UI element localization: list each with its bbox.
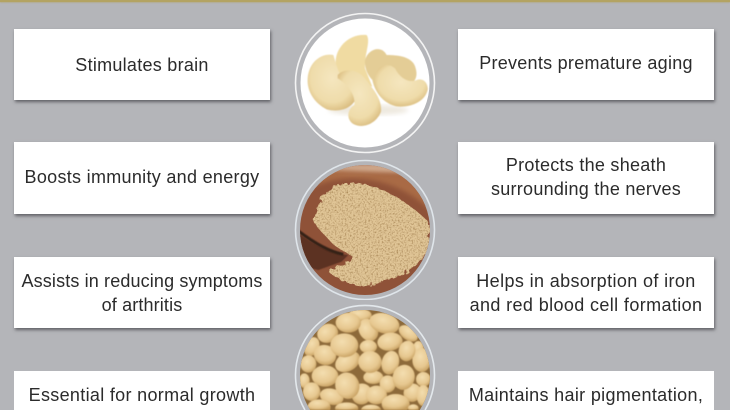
benefit: normal growth: Essential for normal growth bbox=[29, 385, 255, 405]
benefit: arthritis: Assists in reducing symptoms bbox=[22, 270, 262, 290]
image: cashews bbox=[296, 14, 434, 152]
benefit: premature aging: Prevents premature aging bbox=[479, 52, 693, 72]
benefit: iron absorption: and red blood cell formation bbox=[470, 294, 702, 314]
benefit: normal growth bbox=[14, 371, 270, 410]
image: soybeans bbox=[294, 304, 436, 410]
benefit: arthritis: of arthritis bbox=[102, 294, 182, 314]
benefit: stimulates brain: Stimulates brain bbox=[75, 54, 209, 74]
image: sesame seeds on wooden spoon bbox=[295, 160, 434, 299]
benefit: boosts immunity: Boosts immunity and energy bbox=[25, 167, 259, 187]
center food images bbox=[294, 12, 436, 300]
benefit: iron absorption: Helps in absorption of iron bbox=[476, 270, 696, 290]
benefit: hair pigmentation bbox=[458, 371, 714, 410]
benefit: nerve sheath: Protects the sheath bbox=[506, 155, 666, 175]
benefit: nerve sheath: surrounding the nerves bbox=[491, 179, 681, 199]
benefit: boosts immunity bbox=[14, 142, 270, 214]
benefit: premature aging bbox=[458, 29, 714, 100]
top gold rule bbox=[0, 0, 730, 2]
benefit: iron absorption bbox=[458, 257, 714, 328]
benefit: stimulates brain bbox=[14, 29, 270, 100]
benefit: nerve sheath bbox=[458, 142, 714, 214]
benefit: hair pigmentation: Maintains hair pigmentation, bbox=[469, 385, 703, 405]
benefit: arthritis bbox=[14, 257, 270, 328]
